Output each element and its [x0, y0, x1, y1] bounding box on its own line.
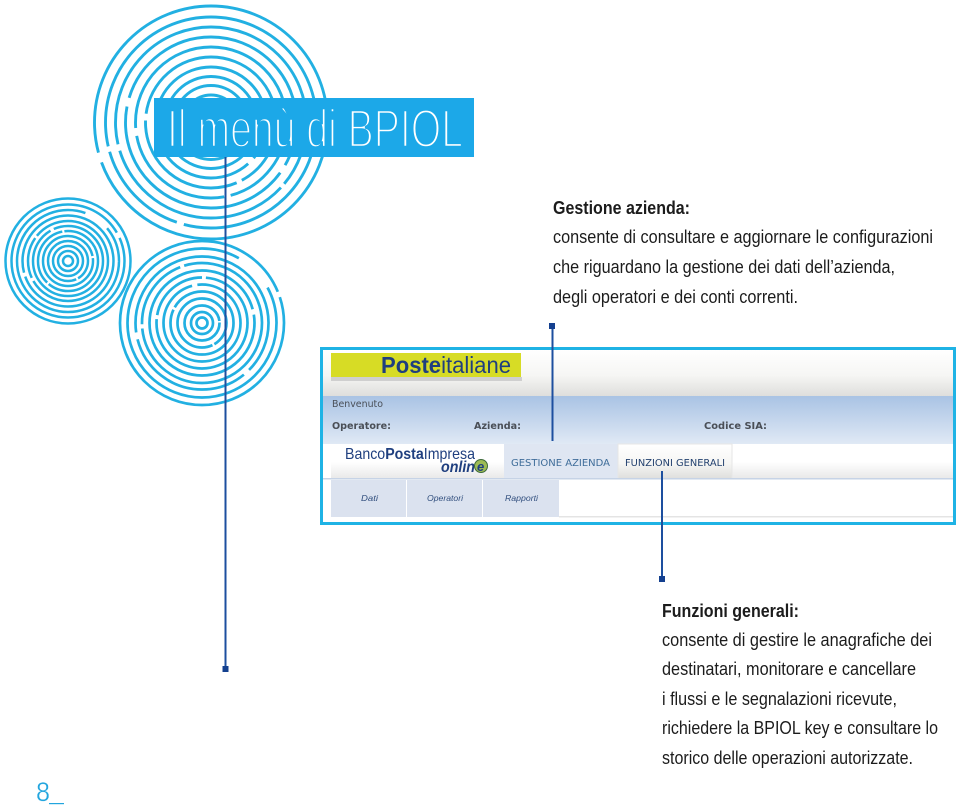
- text block: funzioni generali: destinatari, monitorare e cancellare: [662, 659, 916, 679]
- decorative concentric circles: large: [94, 6, 328, 239]
- sub menu row: Dati: [361, 493, 379, 503]
- text block: funzioni generali: i flussi e le segnalazioni ricevute,: [662, 689, 897, 709]
- welcome labels: Operatore:: [332, 421, 391, 432]
- tab row: BancoPostaImpresa: [345, 446, 475, 463]
- sub menu row: Rapporti: [505, 493, 539, 503]
- tab row: e: [477, 459, 484, 474]
- logo text: Poste italiane: Posteitaliane: [381, 352, 511, 378]
- connector line: gestione azienda: [549, 323, 555, 441]
- text block: funzioni generali: storico delle operazioni autorizzate.: [662, 748, 913, 768]
- welcome labels: Azienda:: [474, 421, 521, 432]
- page number: 8: [36, 777, 50, 807]
- tab row: FUNZIONI GENERALI: [625, 458, 725, 469]
- decorative concentric circles: small: [6, 198, 130, 324]
- text block: gestione azienda: Gestione azienda:: [553, 198, 690, 218]
- tab row: onlin: [441, 459, 475, 476]
- tab row: GESTIONE AZIENDA: [511, 458, 611, 469]
- title bar: Il menù di BPIOL: [167, 99, 463, 159]
- text block: funzioni generali: [662, 601, 938, 768]
- text block: funzioni generali: Funzioni generali:: [662, 601, 799, 621]
- text block: gestione azienda: degli operatori e dei conti correnti.: [553, 287, 798, 307]
- sub menu row: [331, 480, 953, 518]
- welcome labels: [332, 399, 767, 432]
- welcome labels: Benvenuto: [332, 399, 383, 410]
- text block: gestione azienda: che riguardano la gestione dei dati dell’azienda,: [553, 257, 895, 277]
- welcome labels: Codice SIA:: [704, 421, 767, 432]
- decorative concentric circles: medium: [120, 241, 284, 405]
- page number: [36, 777, 64, 807]
- sub menu row: Operatori: [427, 493, 464, 503]
- connector line: title to bottom marker: [222, 157, 228, 672]
- tab row: [323, 444, 953, 480]
- text block: funzioni generali: consente di gestire le anagrafiche dei: [662, 630, 932, 650]
- screenshot panel: BPIOL menu: [322, 348, 954, 524]
- text block: gestione azienda: [553, 198, 933, 307]
- connector line: funzioni generali: [659, 471, 665, 582]
